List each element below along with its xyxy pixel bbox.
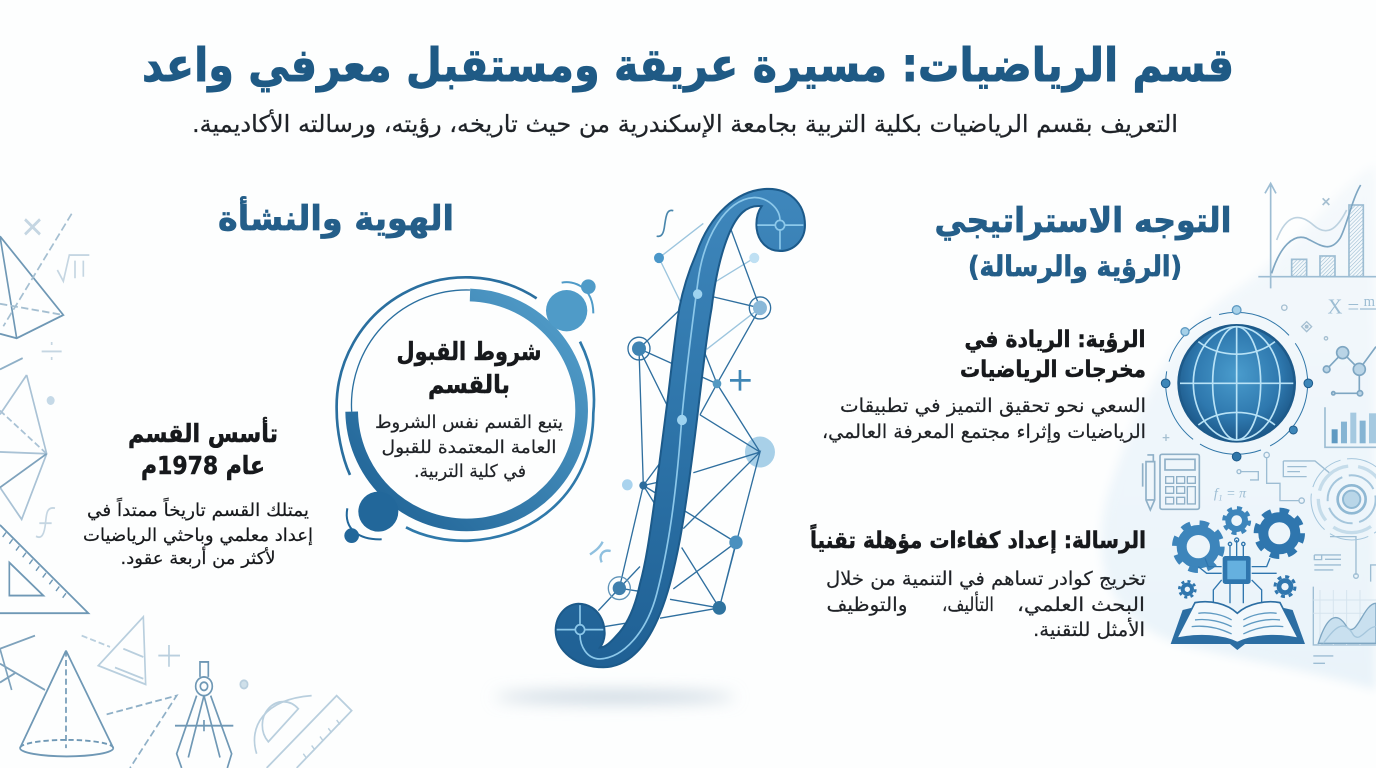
mission text block <box>810 524 1146 641</box>
founding heading: عام 1978م <box>141 451 265 480</box>
bar chart <box>1325 407 1376 447</box>
formula: X = <box>1327 296 1359 318</box>
right section heading: التوجه الاستراتيجي <box>934 201 1232 241</box>
small dots <box>1163 305 1328 441</box>
concentric target <box>1311 459 1376 540</box>
founding heading: تأسس القسم <box>128 417 278 448</box>
title: قسم الرياضيات: مسيرة عريقة ومستقبل معرفي واعد <box>142 38 1234 92</box>
admission description: في كلية التربية. <box>414 462 526 482</box>
left section heading: الهوية والنشأة <box>218 196 454 239</box>
set square <box>0 525 88 613</box>
founding description <box>83 497 313 569</box>
line chart <box>1258 183 1376 288</box>
book <box>1171 607 1305 650</box>
admission description: يتبع القسم نفس الشروط <box>375 413 563 433</box>
circular panel: admission conditions <box>337 277 596 543</box>
mission description <box>826 568 1146 641</box>
founding text block <box>83 417 313 569</box>
mission description: تخريج كوادر تساهم في التنمية من خلال <box>826 568 1146 590</box>
vision description <box>822 395 1146 444</box>
admission description <box>375 413 563 482</box>
right section heading: (الرؤية والرسالة) <box>968 250 1182 283</box>
integral body <box>556 189 805 667</box>
vision text block <box>822 327 1146 444</box>
icon: gears, chip and open book <box>1171 508 1305 650</box>
vision description: السعي نحو تحقيق التميز في تطبيقات <box>840 395 1146 417</box>
left lines <box>0 636 45 690</box>
pyramid <box>0 214 72 338</box>
circuit traces <box>1198 538 1277 603</box>
vision heading: مخرجات الرياضيات <box>960 357 1146 383</box>
mission description: التأليف، <box>942 591 994 616</box>
mission description: والتوظيف <box>826 594 908 616</box>
shadow <box>495 692 735 702</box>
circuit connectors <box>1237 452 1376 582</box>
wave chart <box>1313 587 1376 663</box>
kite triangle <box>0 358 47 519</box>
cone <box>20 651 113 756</box>
vision heading <box>960 327 1146 383</box>
vision description: الرياضيات وإثراء مجتمع المعرفة العالمي، <box>822 421 1146 444</box>
subtitle: التعريف بقسم الرياضيات بكلية التربية بجامعة الإسكندرية من حيث تاريخه، رؤيته، ورسالته الأكاديمية. <box>192 109 1178 138</box>
vision heading: الرؤية: الريادة في <box>964 327 1146 353</box>
founding heading <box>128 417 278 480</box>
decorative illustration: right side math graphics <box>1143 183 1376 663</box>
network nodes <box>608 253 771 615</box>
bottom triangle <box>82 617 180 684</box>
admission heading: بالقسم <box>428 370 510 399</box>
formula: m <box>1364 294 1376 310</box>
admission heading: شروط القبول <box>396 337 542 367</box>
admission description: العامة المعتمدة للقبول <box>382 438 556 458</box>
founding description: لأكثر من أربعة عقود. <box>120 546 276 569</box>
mission heading: الرسالة: إعداد كفاءات مؤهلة تقنياً <box>810 524 1146 554</box>
formula <box>1327 294 1376 318</box>
f formula: f₁ = π <box>1214 486 1247 501</box>
mission description: الأمثل للتقنية. <box>1033 618 1145 641</box>
chip <box>1223 556 1251 584</box>
large background node <box>745 437 775 468</box>
icon: globe <box>1161 306 1313 461</box>
compass <box>175 662 233 768</box>
small symbols <box>730 370 751 391</box>
network lines <box>598 223 760 627</box>
calculator and pen <box>1143 454 1199 510</box>
founding description: يمتلك القسم تاريخاً ممتداً في <box>87 497 309 521</box>
central integral symbol with network <box>495 189 805 702</box>
integral highlights <box>557 198 803 659</box>
node graph <box>1323 347 1376 396</box>
protractor and ruler <box>254 696 352 768</box>
f letter <box>36 508 55 537</box>
admission heading <box>396 337 542 399</box>
gears <box>1175 508 1302 597</box>
right section heading <box>934 201 1232 283</box>
founding description: إعداد معلمي وباحثي الرياضيات <box>83 526 313 546</box>
background: pale blue shape on the right <box>1101 165 1376 690</box>
ring graphic <box>337 277 596 543</box>
decorative illustration: geometry tools on the left <box>0 214 352 768</box>
mission description: البحث العلمي، <box>1017 594 1145 616</box>
symbols <box>25 219 89 360</box>
